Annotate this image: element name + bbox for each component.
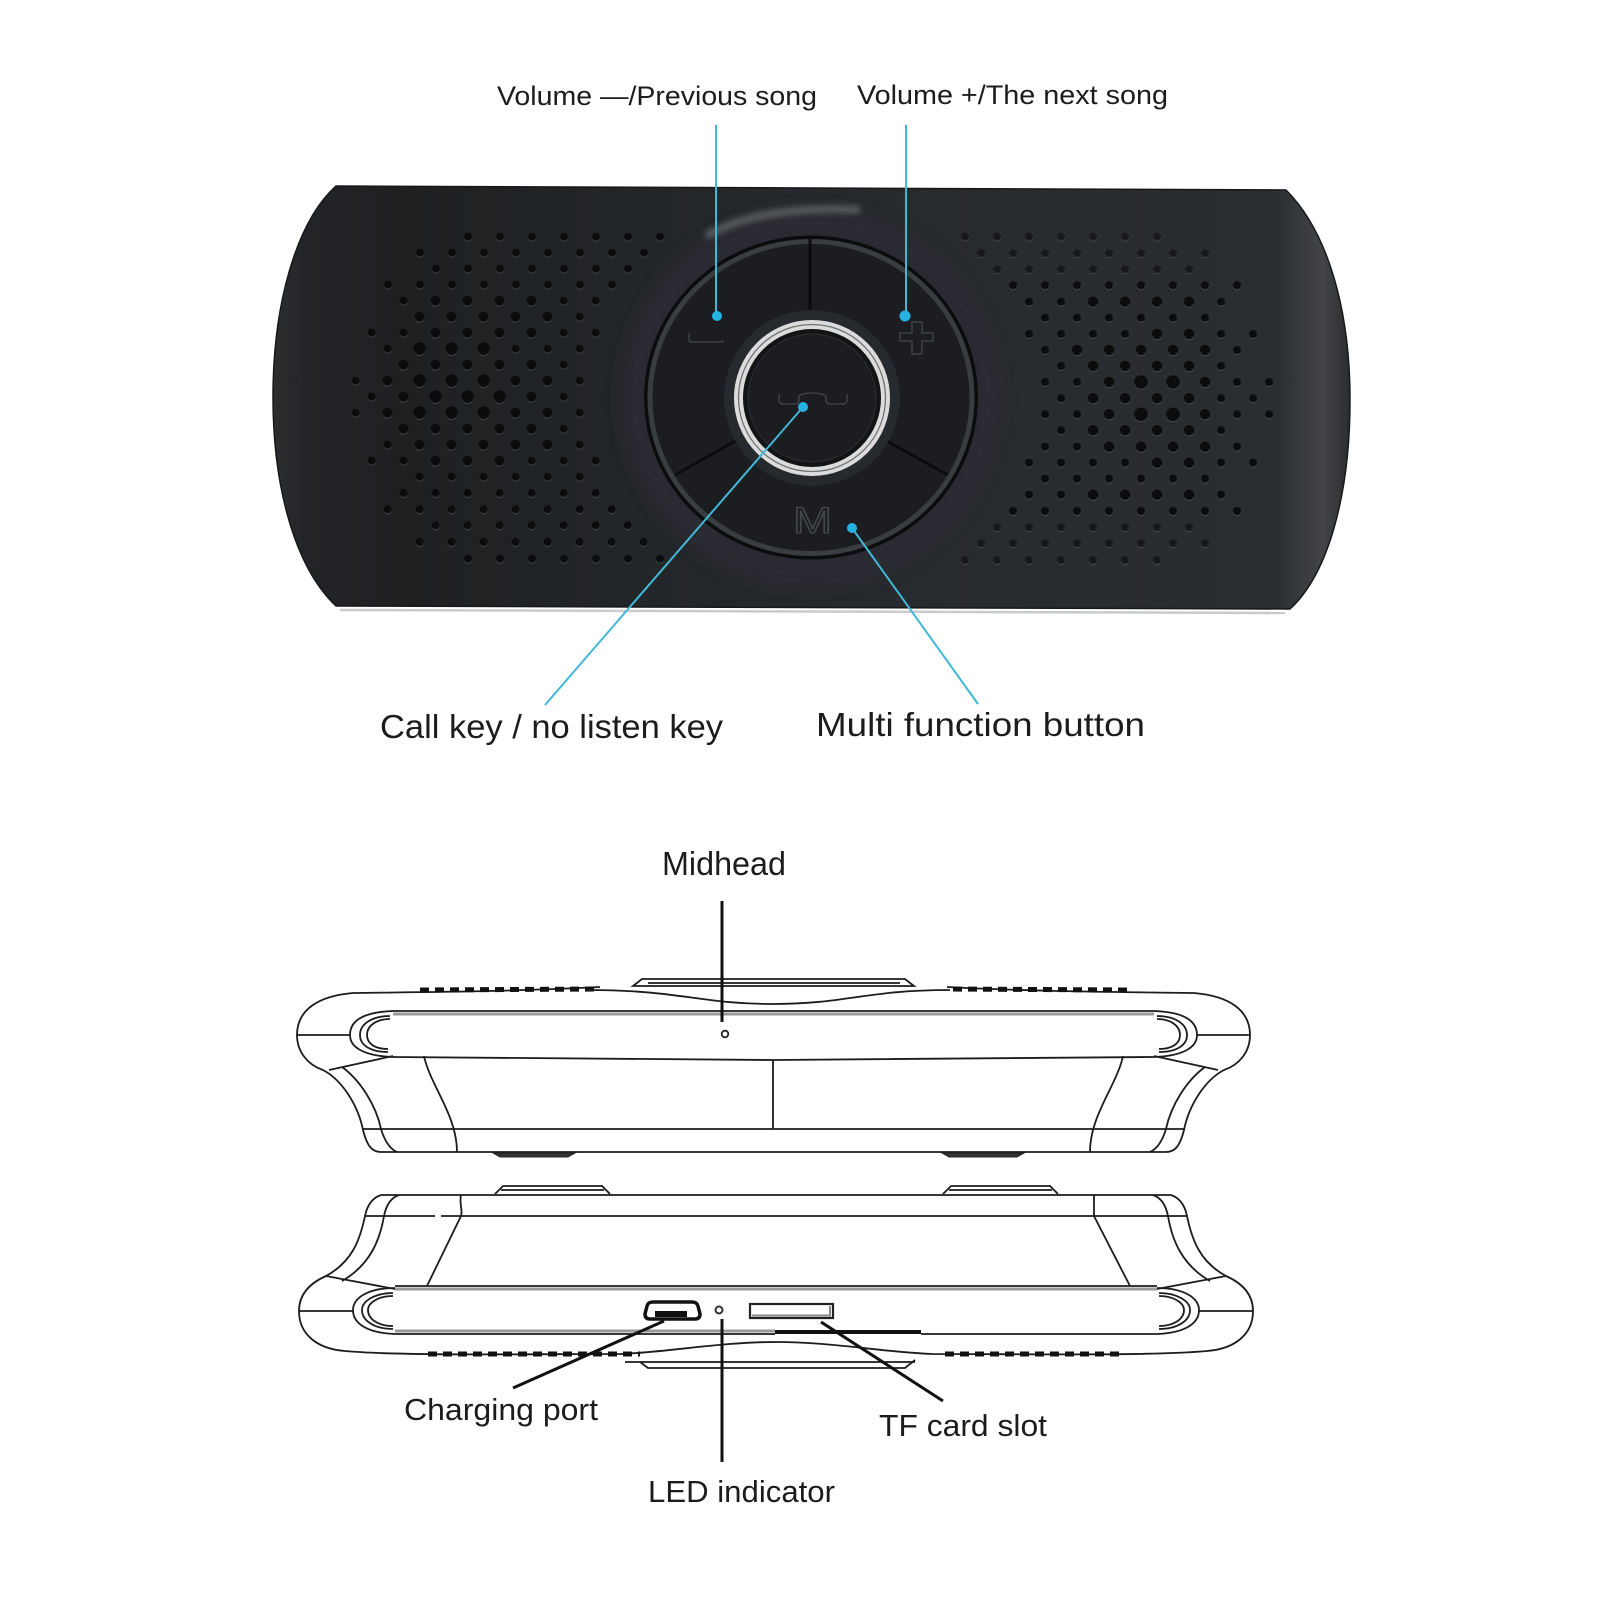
lower thick seam [775, 1330, 921, 1334]
left half outline [297, 987, 600, 1152]
callout: Volume minus / previous song [497, 81, 817, 321]
leader line [715, 125, 717, 316]
bottom bump [625, 1360, 915, 1368]
leader line [852, 528, 978, 704]
label: LED indicator [648, 1474, 835, 1509]
left half outline [299, 1195, 776, 1354]
charging port [645, 1302, 700, 1319]
icon: phone [779, 393, 847, 404]
device photo: speaker front [273, 186, 1350, 613]
icon: M label: M [793, 500, 832, 541]
label: Multi function button [816, 706, 1145, 743]
leader dot [900, 310, 910, 322]
TF card slot [750, 1304, 833, 1318]
speaker body [273, 186, 1350, 609]
callout: TF card slot [821, 1322, 1047, 1443]
feet [493, 1153, 1024, 1157]
leader line [720, 1319, 724, 1462]
right half outline [776, 1195, 1253, 1354]
horizontal body lines [365, 1195, 1187, 1334]
line drawing: top edge view [297, 979, 1250, 1157]
pad outer groove [644, 236, 978, 560]
leader line [821, 1322, 943, 1401]
TF card slot inner [752, 1306, 830, 1316]
icon: plus [900, 322, 933, 354]
callout: Multi function button [816, 523, 1145, 743]
label: Midhead [662, 845, 786, 882]
label: Volume +/The next song [857, 80, 1168, 110]
right half outline [947, 987, 1250, 1152]
LED indicator hole [716, 1306, 722, 1314]
callout: Call key [380, 402, 808, 745]
label: TF card slot [879, 1408, 1047, 1443]
line drawing: bottom edge view [299, 1186, 1253, 1368]
microphone hole [722, 1031, 728, 1037]
icon: minus [689, 333, 723, 342]
left speaker grille [356, 237, 661, 559]
callout: Charging port [404, 1321, 664, 1427]
center button ring [738, 324, 886, 472]
charging port tongue [655, 1311, 687, 1317]
ring recess [724, 310, 900, 486]
callout: Volume plus / next song [857, 80, 1168, 322]
right speaker grille [965, 237, 1270, 560]
pad rim [650, 242, 972, 554]
top wave [587, 990, 950, 1004]
raised collar around control pad [621, 208, 1001, 588]
leader line [545, 407, 803, 705]
leader dot [712, 311, 722, 321]
leader line [905, 125, 907, 316]
ring dark line [738, 324, 886, 472]
label: Call key / no listen key [380, 708, 724, 745]
center button [748, 334, 876, 462]
leader dot [847, 523, 857, 533]
control pad [644, 236, 978, 560]
slot and base lines [363, 1011, 1184, 1152]
slot shading [393, 1012, 1154, 1016]
leader dot [798, 402, 808, 412]
top bump [633, 979, 914, 986]
top feet [495, 1186, 1058, 1194]
label: Charging port [404, 1392, 598, 1427]
leader line [720, 901, 724, 1022]
bottom edge highlight [340, 610, 1285, 613]
label: Volume —/Previous song [497, 81, 817, 111]
leader line [513, 1321, 664, 1388]
slot shading [395, 1289, 1157, 1331]
collar highlight [706, 209, 860, 236]
button dividers [675, 237, 948, 475]
